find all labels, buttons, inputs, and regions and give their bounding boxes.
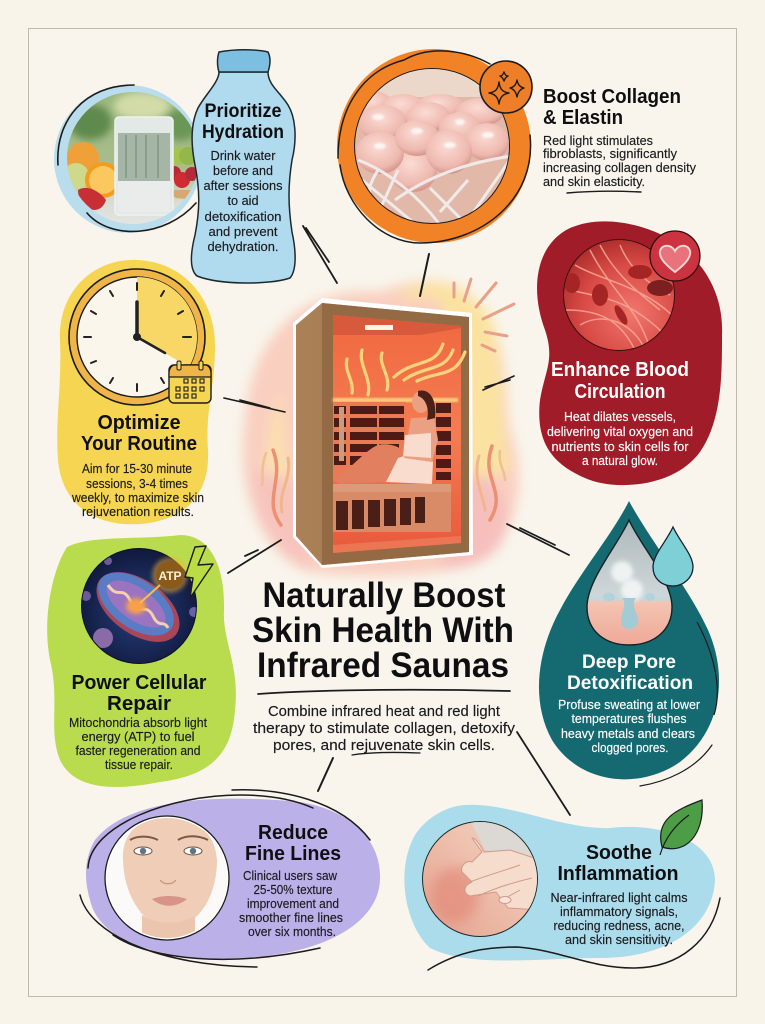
- heat lines left and right: [262, 279, 514, 525]
- body text: inflammatory signals,: [560, 904, 678, 919]
- body text: faster regeneration and: [76, 743, 200, 758]
- body text: and prevent: [208, 224, 278, 239]
- body text: tissue repair.: [105, 757, 173, 772]
- heading: Deep Pore: [582, 652, 676, 673]
- icon: calendar: [169, 361, 211, 403]
- body text: energy (ATP) to fuel: [82, 729, 195, 744]
- heading: Your Routine: [81, 433, 197, 455]
- body text: heavy metals and clears: [561, 726, 695, 741]
- body text: to aid: [228, 193, 258, 208]
- intro text: Combine infrared heat and red light: [268, 703, 501, 720]
- intro text: pores, and rejuvenate skin cells.: [273, 737, 495, 754]
- body text: weekly, to maximize skin: [71, 490, 204, 505]
- watercolor glow: [243, 281, 519, 576]
- body text: [550, 890, 688, 947]
- body text: nutrients to skin cells for: [552, 439, 689, 454]
- body text: a natural glow.: [582, 453, 658, 468]
- heading: Circulation: [574, 381, 666, 403]
- heading: Detoxification: [567, 673, 693, 694]
- title: Naturally Boost: [262, 576, 506, 615]
- panel: enhance blood circulation: [537, 221, 722, 485]
- arrows: hand-drawn connector strokes: [224, 226, 712, 815]
- heading: Soothe: [586, 842, 652, 864]
- body text: Profuse sweating at lower: [558, 697, 701, 712]
- intro text: therapy to stimulate collagen, detoxify: [253, 720, 516, 737]
- photo: hand on skin: [422, 820, 540, 938]
- icon: leaf: [660, 800, 702, 855]
- body text: smoother fine lines: [239, 910, 343, 925]
- body text: [558, 697, 701, 755]
- icon: lightning bolt: [185, 546, 213, 598]
- heading: Enhance Blood: [551, 359, 689, 381]
- body text: reducing redness, acne,: [554, 918, 684, 933]
- body text: sessions, 3-4 times: [86, 476, 188, 491]
- photo: woman's face: [105, 816, 229, 945]
- body text: fibroblasts, significantly: [543, 146, 677, 161]
- body text: Aim for 15-30 minute: [82, 461, 192, 476]
- wave lines inside: [346, 344, 465, 395]
- bench and lower panel: [333, 484, 451, 492]
- panel: soothe inflammation: [404, 800, 720, 970]
- body text: dehydration.: [208, 239, 278, 254]
- sauna cabin: [293, 298, 473, 568]
- back panels: [333, 402, 406, 478]
- heading: Fine Lines: [245, 843, 341, 865]
- body text: over six months.: [248, 924, 336, 939]
- body text: Heat dilates vessels,: [564, 409, 676, 424]
- heading: & Elastin: [543, 107, 623, 129]
- body text: Drink water: [210, 148, 276, 163]
- panel: deep pore detoxification: [539, 501, 719, 779]
- icon: heart badge: [650, 231, 700, 281]
- woman: [333, 444, 406, 484]
- photo: water glass and fruit: [54, 85, 206, 233]
- heading: Inflammation: [558, 863, 678, 885]
- title: Skin Health With: [252, 611, 514, 650]
- title: Infrared Saunas: [257, 646, 509, 685]
- body text: improvement and: [247, 896, 339, 911]
- heading: Reduce: [258, 822, 328, 844]
- body text: detoxification: [204, 209, 282, 224]
- body text: clogged pores.: [592, 740, 668, 755]
- body text: Near-infrared light calms: [550, 890, 688, 905]
- title: [252, 576, 514, 694]
- water bottle shape: [191, 72, 295, 283]
- body text: Red light stimulates: [543, 133, 653, 148]
- photo: blood vessel: [560, 238, 680, 353]
- panel: optimize routine: [57, 260, 215, 524]
- body text: [543, 133, 696, 189]
- body text: temperatures flushes: [572, 711, 687, 726]
- heading: Power Cellular: [72, 672, 207, 694]
- heading: Optimize: [98, 412, 180, 434]
- body text: 25-50% texture: [254, 882, 332, 897]
- heading: Boost Collagen: [543, 86, 681, 108]
- heading: Hydration: [202, 122, 284, 143]
- panel: boost collagen: [337, 49, 696, 243]
- panel: prioritize hydration: [54, 50, 295, 283]
- icon: water drop: [653, 527, 693, 586]
- body text: [239, 868, 343, 939]
- orange ring with cell photo: [337, 49, 532, 243]
- photo: mitochondria: [80, 547, 199, 665]
- central sauna illustration: [243, 279, 519, 576]
- panel: power cellular repair: [47, 535, 236, 787]
- photo: pore droplet: [587, 520, 672, 645]
- body text: Clinical users saw: [243, 868, 338, 883]
- body text: and skin elasticity.: [543, 174, 645, 189]
- panel: reduce fine lines: [80, 790, 380, 967]
- body text: Mitochondria absorb light: [69, 715, 207, 730]
- body text: [547, 409, 693, 468]
- intro text: [253, 703, 516, 755]
- body text: rejuvenation results.: [82, 504, 194, 519]
- body text: after sessions: [204, 178, 283, 193]
- heading: Prioritize: [204, 101, 282, 122]
- body text: [204, 148, 283, 254]
- ATP burst: ATP: [158, 569, 182, 583]
- body text: increasing collagen density: [543, 160, 696, 175]
- body text: and skin sensitivity.: [565, 932, 673, 947]
- body text: before and: [213, 163, 273, 178]
- heading: Repair: [107, 693, 171, 715]
- icon: clock: [69, 269, 205, 405]
- body text: [69, 715, 207, 772]
- body text: [71, 461, 204, 519]
- body text: delivering vital oxygen and: [547, 424, 693, 439]
